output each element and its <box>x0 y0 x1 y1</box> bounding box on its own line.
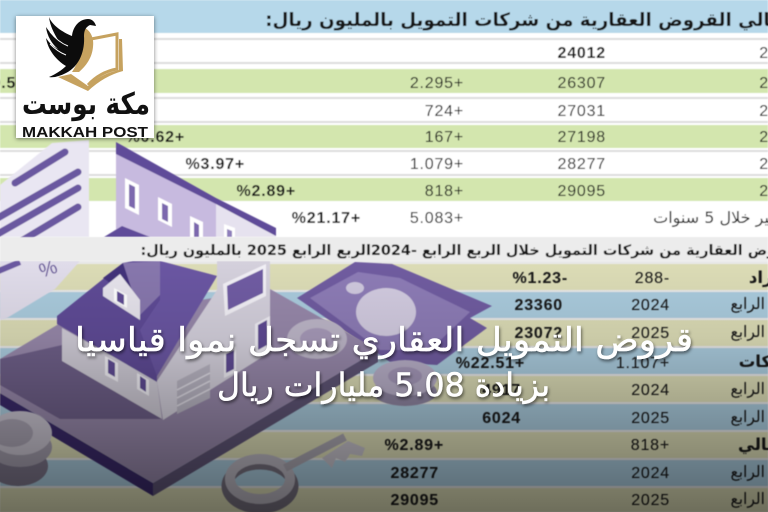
illustration: key <box>227 437 365 508</box>
right wall and tower <box>157 261 270 420</box>
illustration: money bills <box>297 262 492 365</box>
illustration: upper house wall <box>104 142 276 237</box>
change and year columns: 2025 <box>631 410 670 427</box>
left wall <box>62 328 162 419</box>
lower table content <box>0 237 768 509</box>
value columns: 4917 <box>482 382 521 399</box>
change and year columns: 2024 <box>631 382 670 399</box>
value columns: 28277 <box>390 465 439 482</box>
dormer <box>103 274 140 320</box>
value columns: 23072 <box>514 325 563 342</box>
illustration: coins left <box>0 411 52 486</box>
lower table header <box>0 237 768 261</box>
change and year columns: 2024 <box>631 297 670 314</box>
value columns: 6024 <box>482 410 521 427</box>
top table <box>0 0 768 237</box>
illustration: coins right <box>287 319 437 406</box>
top table values: 24012 <box>558 45 606 62</box>
lower table rows <box>0 261 768 512</box>
title: قروض التمويل العقاري تسجل نموا قياسيا <box>75 320 693 360</box>
top table header <box>0 0 768 33</box>
top table values: 27031 <box>558 103 606 120</box>
illustration: document paper: % <box>36 256 61 283</box>
roof <box>57 261 217 382</box>
change and year columns: 288- <box>635 270 670 287</box>
value columns: %2.89+ <box>384 437 444 454</box>
top table values: 2.295+ <box>410 75 464 92</box>
change and year columns: 1.107+ <box>616 355 670 372</box>
value columns: %1.23- <box>512 270 568 287</box>
top table values: 26307 <box>558 75 606 92</box>
value columns: 23360 <box>514 297 563 314</box>
top table values: %3.97+ <box>185 156 245 173</box>
top table values: 1.079+ <box>410 156 464 173</box>
change and year columns: 2025 <box>631 492 670 509</box>
title: بزيادة 5.08 مليارات ريال <box>217 366 550 404</box>
top table values: 27198 <box>558 129 606 146</box>
top table values: %0.62+ <box>125 129 185 146</box>
change and year columns: 2024 <box>631 465 670 482</box>
top table values: 818+ <box>425 183 464 200</box>
value columns: %22.51+ <box>456 355 525 372</box>
dark gradient overlay <box>0 262 768 512</box>
row labels <box>730 267 768 509</box>
top table row bands <box>0 38 768 201</box>
value columns: 29095 <box>390 492 439 509</box>
logo card <box>16 16 154 141</box>
change and year columns <box>616 270 670 509</box>
title <box>75 320 693 404</box>
value columns <box>384 270 568 509</box>
platform <box>0 289 378 496</box>
top table values: %2.89+ <box>236 183 296 200</box>
top table values <box>0 45 768 228</box>
icon: open book <box>58 28 123 91</box>
illustration: document paper <box>0 140 89 320</box>
top table values: 29095 <box>558 183 606 200</box>
logo latin name: MAKKAH POST <box>22 124 148 141</box>
change and year columns: 2025 <box>631 325 670 342</box>
top table values: 724+ <box>425 103 464 120</box>
logo arabic name: مكة بوست <box>22 87 150 122</box>
icon: eagle <box>46 17 96 77</box>
top table values: 167+ <box>425 129 464 146</box>
illustration: house on platform <box>0 261 378 496</box>
top table values: 5.083+ <box>410 210 464 227</box>
change and year columns: 818+ <box>631 437 670 454</box>
top table values: 28277 <box>558 156 606 173</box>
top table values: %21.17+ <box>292 210 361 227</box>
